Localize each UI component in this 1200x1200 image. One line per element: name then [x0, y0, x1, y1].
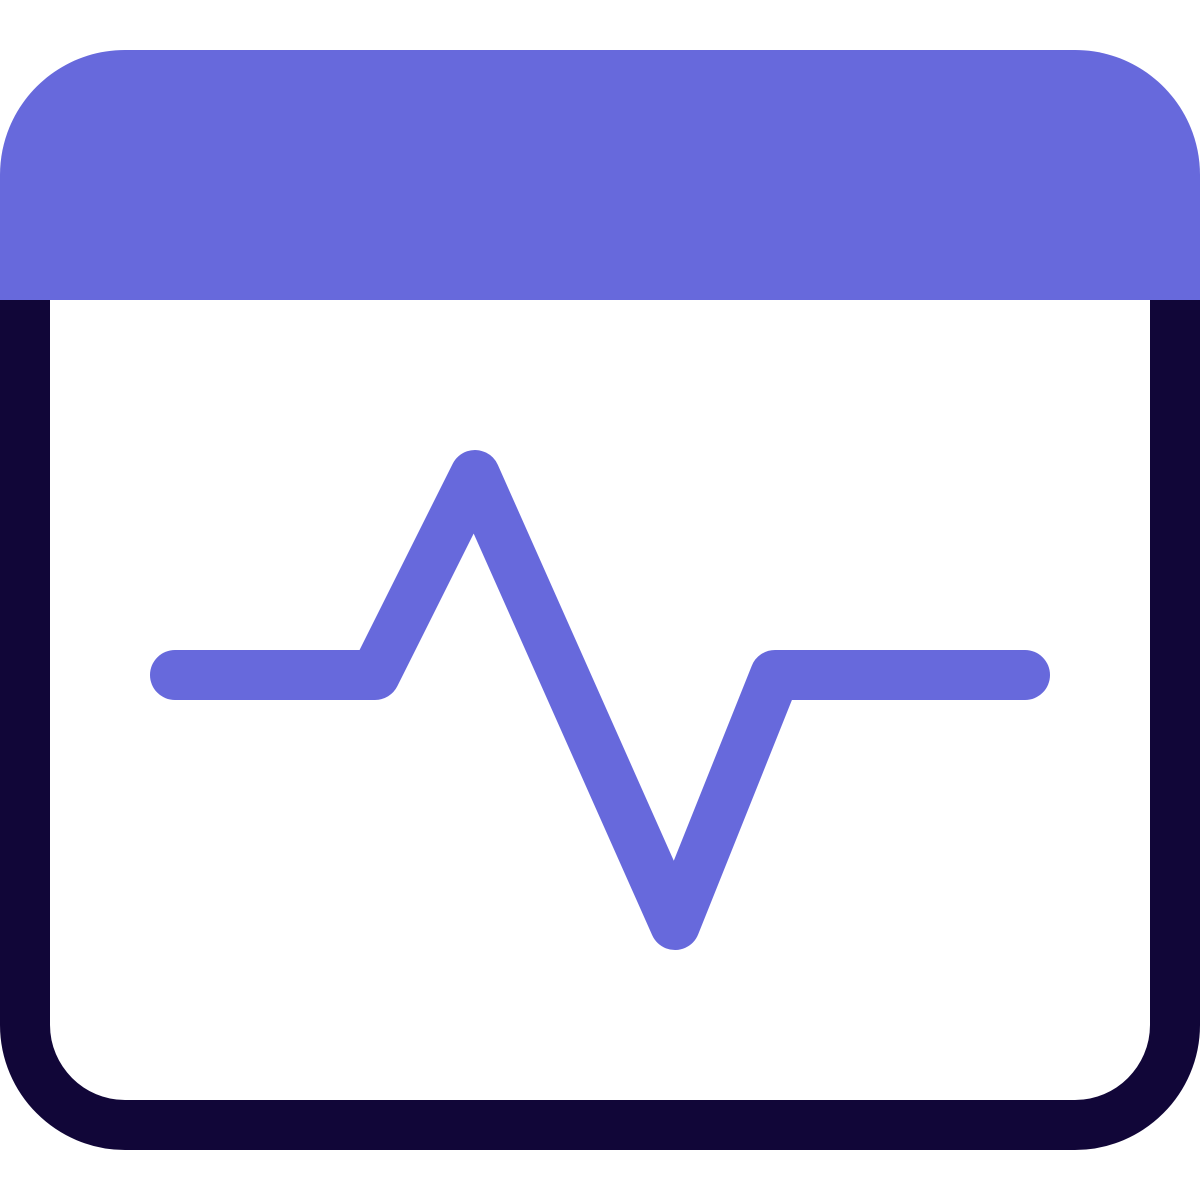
pulse line	[175, 475, 1025, 925]
window frame	[25, 280, 1175, 1125]
window title bar	[0, 50, 1200, 300]
